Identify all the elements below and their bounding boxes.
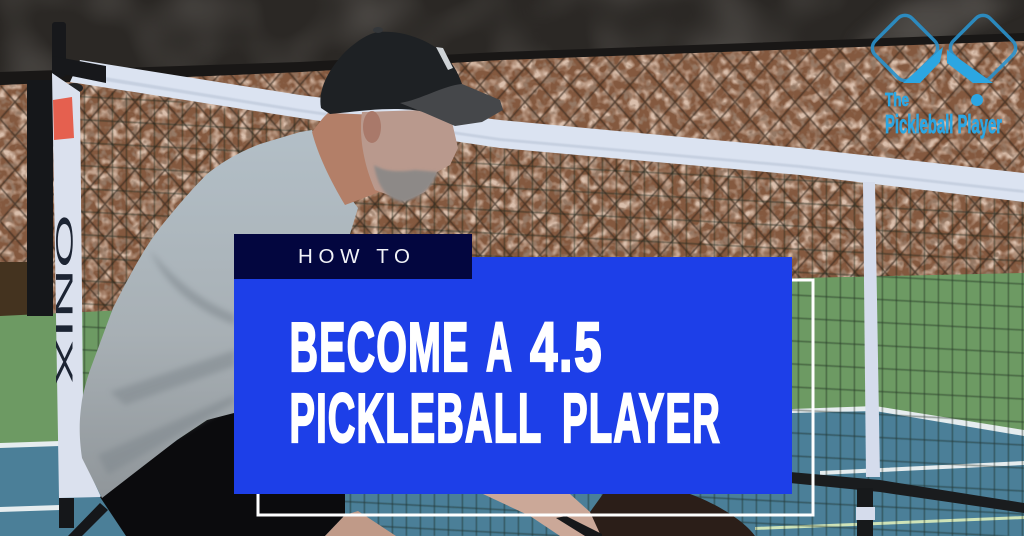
icon: crossed paddles: [868, 11, 1020, 85]
neck: [312, 113, 385, 205]
cap brim: [400, 84, 503, 126]
icon: paddle handles: [903, 47, 993, 83]
cap: [320, 32, 462, 114]
cap button: [373, 27, 383, 33]
shirt: [80, 130, 358, 498]
brand name: ONIX: ONIX: [50, 214, 77, 385]
title panel: [234, 257, 792, 494]
icon: ball: [971, 94, 983, 106]
paddle: [590, 494, 755, 536]
background: gravel hillside: [0, 40, 1024, 320]
shorts: [100, 410, 345, 536]
title text: BECOME: [290, 308, 470, 386]
background: green court: [0, 273, 1024, 446]
background: blue court: [0, 406, 1024, 536]
title text: [290, 308, 721, 457]
net mesh: [80, 88, 1024, 536]
brand logo: The Pickleball Player: [868, 11, 1020, 139]
net side strap with brand: [50, 73, 101, 498]
player hand and paddle: [325, 494, 755, 536]
white outline frame: [258, 280, 813, 515]
title text: PICKLEBALL: [290, 379, 542, 457]
hand: [483, 494, 601, 536]
shirt shading: [98, 250, 235, 475]
title text: PLAYER: [562, 379, 721, 457]
background: dark fence rail: [0, 33, 1024, 85]
grip: [556, 516, 602, 536]
how to tab: HOW TO: [298, 245, 410, 268]
brand logo: red mark: [53, 97, 74, 140]
title text: A: [486, 308, 513, 386]
post foot: [59, 498, 108, 536]
logo wordmark: [885, 90, 1002, 139]
net post and bracket: [52, 22, 106, 93]
knee: [325, 511, 396, 536]
face: [361, 110, 458, 201]
ear: [363, 111, 381, 143]
how to tab: [234, 234, 472, 279]
cap logo: [436, 47, 453, 70]
background: dark fence post: [27, 80, 53, 316]
title text: 4.5: [530, 308, 603, 386]
background: dark upper wall: [0, 0, 1024, 100]
right horizontal pole and upright: [790, 472, 1024, 536]
net top band: [70, 60, 1024, 202]
player: [80, 27, 503, 536]
logo wordmark: The: [885, 90, 909, 110]
right net strap: [863, 182, 880, 477]
beard: [374, 165, 438, 202]
